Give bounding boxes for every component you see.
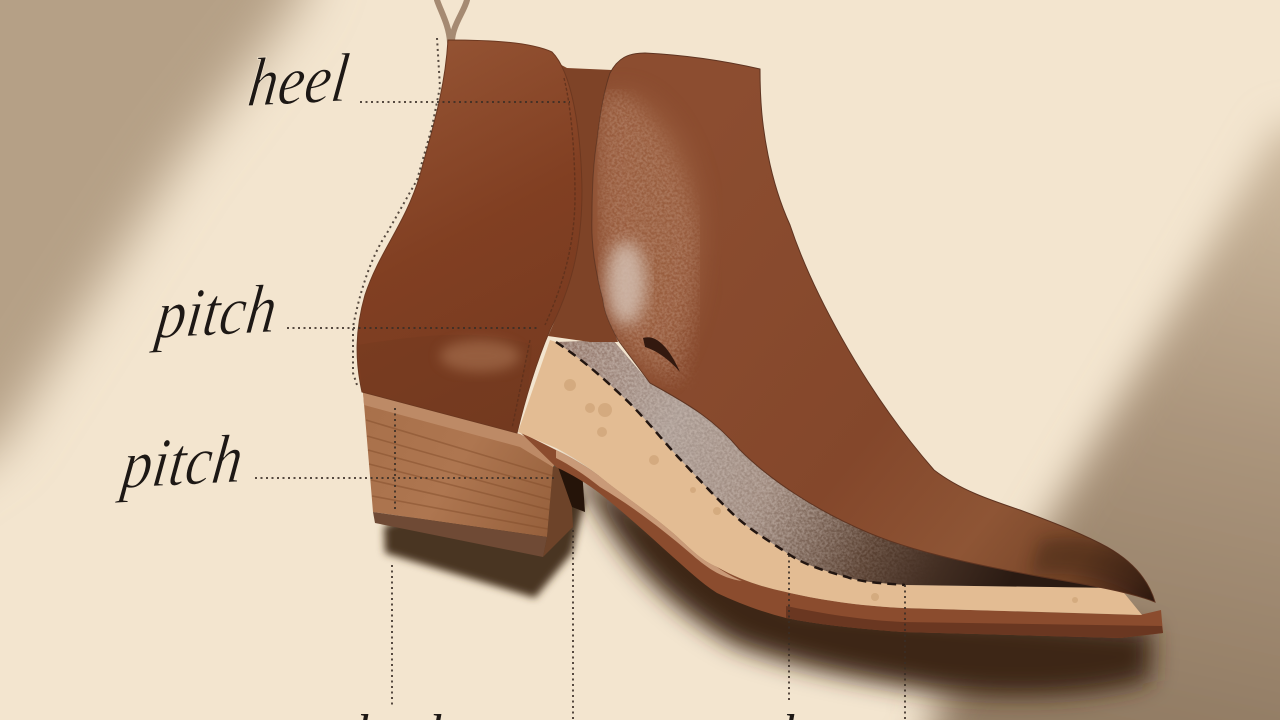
label: pitch lower: pitch (114, 421, 247, 504)
boot cast shadow on the wall (384, 460, 1152, 696)
dark edge under the vamp toward the toe (1030, 538, 1160, 610)
dotted guide lines (255, 38, 905, 720)
slit (643, 337, 680, 372)
leather highlight (358, 335, 532, 433)
label: pitch upper: pitch (148, 271, 281, 354)
pebbled sheen (598, 89, 700, 390)
dashed last line (556, 342, 905, 585)
outsole strip (520, 432, 1163, 638)
label: heel: heel (244, 40, 353, 122)
heel block (363, 392, 585, 557)
cork midsole (518, 340, 1142, 615)
inner lining (558, 341, 1100, 588)
pull tab (437, 0, 467, 42)
window shadow: bottom right (930, 125, 1280, 720)
labels cropped at the bottom edge (356, 705, 808, 720)
window shadow: top left (0, 0, 325, 500)
boot illustration (357, 0, 1163, 638)
elastic gusset (548, 60, 618, 342)
back quarter (357, 40, 582, 433)
soft sheen (595, 92, 701, 380)
front vamp (592, 53, 1160, 610)
stitching (512, 78, 575, 428)
bright highlight (606, 241, 646, 325)
